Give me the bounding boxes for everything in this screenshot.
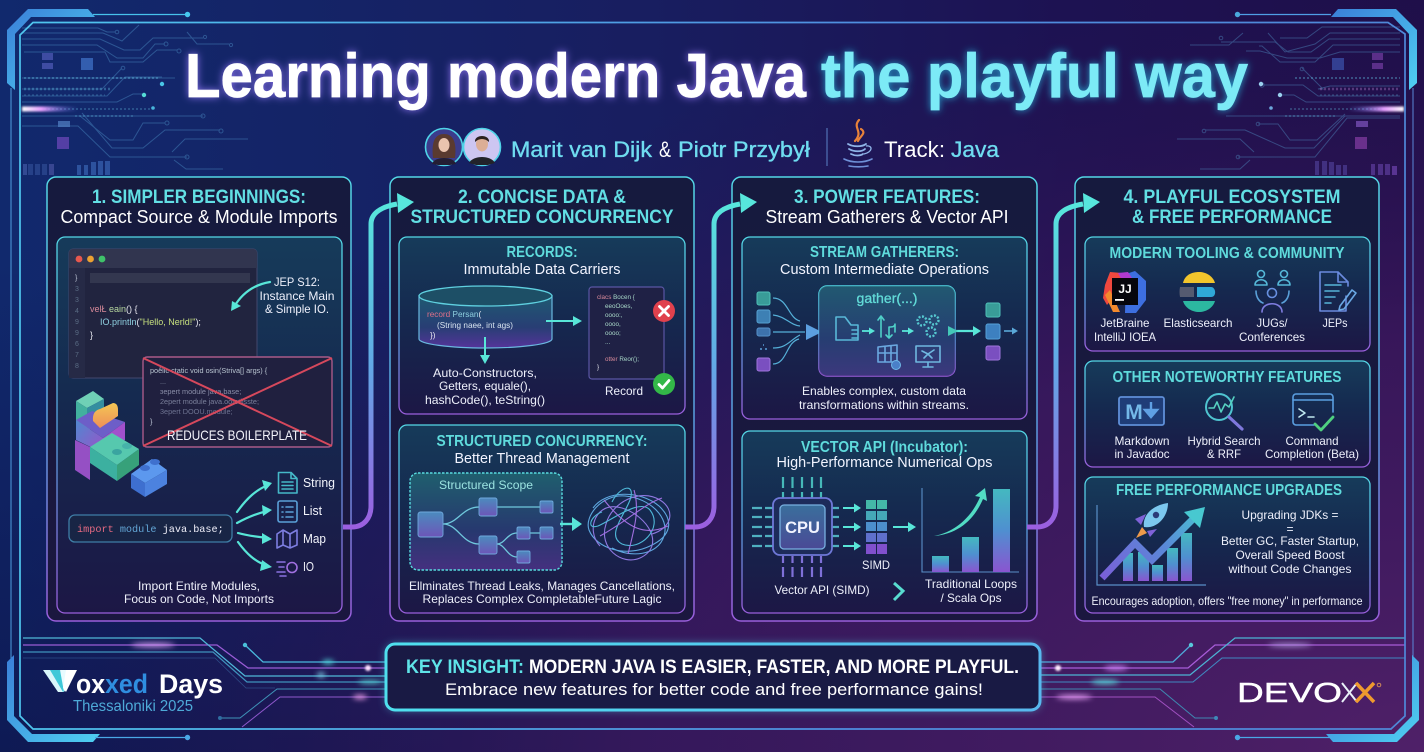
gatherers description: Enables complex, custom data <box>802 384 966 398</box>
sub-panel: structured concurrency <box>399 425 685 613</box>
sub-panel: structured concurrency: Better Thread Management <box>454 451 630 467</box>
panel 2 heading <box>410 187 674 228</box>
icon: markdown <box>1119 397 1164 425</box>
logo: voxxed days thessaloniki: oxxed <box>76 669 148 699</box>
code window: compact source: 9 <box>75 330 79 337</box>
code window: compact source: } <box>90 330 93 340</box>
callout: JEP 512 <box>231 275 334 316</box>
crossed-out boilerplate code: 3epert DOOU.module; <box>160 407 233 416</box>
icon: elasticsearch <box>1180 272 1215 312</box>
icon: cpu chip <box>752 477 839 577</box>
panel 1 summary: Focus on Code, Not Imports <box>124 592 274 606</box>
track label: Java <box>951 137 1000 162</box>
code window: compact source: 7 <box>75 352 79 359</box>
upgrade text: Better GC, Faster Startup, <box>1221 534 1359 548</box>
icon: tangled threads <box>588 488 670 560</box>
arrow to chart <box>893 522 916 532</box>
adoption note: Encourages adoption, offers "free money" in performance <box>1092 594 1363 608</box>
title: Learning modern Java <box>185 42 806 111</box>
panel 3 heading <box>766 187 1008 227</box>
sub-panel: tooling and community <box>1085 237 1370 351</box>
speaker names <box>511 137 810 162</box>
panel 2 heading: STRUCTURED CONCURRENCY <box>410 207 674 228</box>
crossed-out boilerplate code: poêlic ctatic void osin(Striva[] args) { <box>150 366 268 375</box>
module list: String, List, Map, IO: List <box>303 504 323 518</box>
panel 3: power features <box>732 177 1037 621</box>
logo: devoxx <box>1237 677 1381 708</box>
class versus record code card: oooo, <box>605 321 621 328</box>
code window: compact source: IO.println("Hello, Nerld!"); <box>100 317 201 327</box>
class versus record code card: ... <box>605 339 610 346</box>
sub-panel: stream gatherers <box>742 237 1027 419</box>
logo: voxxed days thessaloniki: Thessaloniki 2025 <box>73 698 193 715</box>
arrow: panel 1 to panel 2 <box>343 193 414 527</box>
SIMD grid: SIMD <box>862 558 890 572</box>
sub-panel: vector api <box>742 431 1027 613</box>
speaker names: Marit van Dijk <box>511 137 653 162</box>
upgrade text <box>1221 508 1359 576</box>
title: the playful way <box>821 42 1248 111</box>
SIMD grid <box>862 500 890 572</box>
sub-panel: records: RECORDS: <box>506 244 578 261</box>
sub-panel: free performance upgrades: FREE PERFORMANCE UPGRADES <box>1116 482 1342 499</box>
code window: compact source: } <box>75 275 78 282</box>
module list: String, List, Map, IO: String <box>303 476 335 490</box>
icon: markdown: M <box>1125 401 1143 424</box>
logo: voxxed days thessaloniki <box>43 669 223 715</box>
panel 2 heading: 2. CONCISE DATA & <box>458 187 626 208</box>
key insight callout: MODERN JAVA IS EASIER, FASTER, AND MORE PLAYFUL. <box>529 657 1019 678</box>
upgrade text: without Code Changes <box>1227 562 1352 576</box>
logo: voxxed days thessaloniki: Days <box>159 669 223 699</box>
arrow: panel 2 to panel 3 <box>685 193 757 527</box>
sub-panel: tooling and community: MODERN TOOLING & COMMUNITY <box>1110 245 1345 262</box>
record cylinder: record Persan( <box>427 310 481 319</box>
tool labels: JetBraine <box>1100 316 1150 330</box>
icon: people <box>1255 270 1290 312</box>
crossed-out boilerplate code: REDUCES BOILERPLATE <box>167 427 307 443</box>
icon: hybrid search <box>1206 394 1242 429</box>
tool labels <box>1094 316 1348 344</box>
panel 4 heading <box>1124 187 1340 228</box>
icon: command terminal <box>1293 394 1333 430</box>
sub-panel: stream gatherers: STREAM GATHERERS: <box>810 244 959 261</box>
icon: java cup <box>844 120 872 167</box>
upgrade text: Overall Speed Boost <box>1236 548 1345 562</box>
class versus record code card: clacs Bocen { <box>597 294 635 301</box>
icon: document with pen <box>1320 272 1356 311</box>
crossed-out boilerplate code: ... <box>160 377 166 386</box>
feature labels <box>1114 434 1359 461</box>
class versus record code card: } <box>597 364 599 371</box>
feature labels: Markdown <box>1114 434 1170 448</box>
structured scope tree: Structured Scope <box>439 478 533 492</box>
code window: compact source: 8 <box>75 363 79 370</box>
record cylinder: }) <box>430 331 436 340</box>
sub-panel: records: Immutable Data Carriers <box>464 262 620 278</box>
class versus record code card <box>589 287 675 398</box>
panel 2 summary: Ellminates Thread Leaks, Manages Cancellations, <box>409 579 675 593</box>
sub-panel: vector api: VECTOR API (Incubator): <box>801 439 968 456</box>
module list: String, List, Map, IO: Map <box>303 532 326 546</box>
tool labels: IntelliJ IOEA <box>1094 330 1156 344</box>
feature labels: Command <box>1286 434 1338 448</box>
code window: compact source: 6 <box>75 341 79 348</box>
icon: cpu chip: CPU <box>785 519 820 537</box>
panel 1: simpler beginnings <box>47 177 351 621</box>
panel 3 heading: Stream Gatherers & Vector API <box>766 207 1008 227</box>
gatherers description <box>799 384 969 412</box>
sub-panel: other noteworthy features: OTHER NOTEWORTHY FEATURES <box>1112 369 1342 386</box>
tool labels: JEPs <box>1322 316 1348 330</box>
bar chart: performance <box>922 488 1019 572</box>
code window: compact source: velŁ eain() { <box>90 304 138 314</box>
class versus record code card: Record <box>605 384 643 398</box>
code window: compact source: 3 <box>75 286 79 293</box>
icon: intellij: JJ <box>1118 282 1132 296</box>
gather box <box>819 286 981 376</box>
sub-panel: vector api: High-Performance Numerical Ops <box>776 455 992 471</box>
vector comparison labels: Vector API (SIMD) <box>774 583 870 597</box>
crossed-out boilerplate code: 2epert module java.ootetlisste; <box>160 397 259 406</box>
speaker names: Piotr Przybył <box>678 137 810 162</box>
panel 3 heading: 3. POWER FEATURES: <box>794 187 980 208</box>
record cylinder <box>419 286 552 348</box>
sub-panel: other noteworthy features <box>1085 361 1370 467</box>
class versus record code card: oooo; <box>605 330 621 337</box>
logo: devoxx: DEVO <box>1237 677 1342 708</box>
gatherers description: transformations within streams. <box>799 398 969 412</box>
panel 1 summary: Import Entire Modules, <box>138 579 260 593</box>
panel 1 heading: 1. SIMPLER BEGINNINGS: <box>92 187 306 208</box>
panel 1 heading <box>60 187 338 227</box>
panel 2: concise data and structured concurrency <box>390 177 694 621</box>
class versus record code card: oooo:, <box>605 312 623 319</box>
arrows to module packages <box>237 480 272 571</box>
key insight callout: Embrace new features for better code and free performance gains! <box>445 680 983 699</box>
key insight callout: KEY INSIGHT: <box>406 657 524 678</box>
vector comparison labels: / Scala Ops <box>940 591 1002 605</box>
code window: compact source <box>69 249 257 378</box>
output elements <box>986 303 1018 360</box>
callout: JEP 512: Instance Main <box>260 289 334 303</box>
upgrade text: Upgrading JDKs = <box>1242 508 1338 522</box>
structured scope tree <box>410 473 562 570</box>
vector comparison labels: Traditional Loops <box>925 577 1017 591</box>
track label: Track: <box>884 137 945 162</box>
module list: String, List, Map, IO: IO <box>303 560 314 574</box>
arrows from record <box>480 316 582 364</box>
sub-panel: records <box>399 237 685 414</box>
icon: building blocks <box>75 391 167 497</box>
panel 4 heading: 4. PLAYFUL ECOSYSTEM <box>1124 187 1340 208</box>
tool labels: JUGs/ <box>1256 316 1288 330</box>
tool labels: Elasticsearch <box>1164 316 1232 330</box>
code window: compact source: 4 <box>75 308 79 315</box>
generated members text: Auto-Constructors, <box>433 366 537 380</box>
panel 1 summary <box>124 579 274 606</box>
generated members text: hashCode(), teString() <box>425 393 545 407</box>
upgrade text: = <box>1286 522 1294 536</box>
funnel triangle and arrow <box>806 324 832 340</box>
code window: compact source: 9 <box>75 319 79 326</box>
import module code box <box>69 515 232 542</box>
generated members text <box>425 366 545 407</box>
tool labels: Conferences <box>1239 330 1305 344</box>
crossed-out boilerplate code: ɜepert module java.base; <box>160 387 241 396</box>
feature labels: Completion (Beta) <box>1265 447 1359 461</box>
panel 4 heading: & FREE PERFORMANCE <box>1132 207 1332 228</box>
speaker names: & <box>659 137 671 162</box>
panel 2 summary <box>409 579 675 606</box>
arrow: panel 3 to panel 4 <box>1027 193 1100 527</box>
arrows to SIMD <box>843 504 861 550</box>
input elements <box>757 292 805 371</box>
record cylinder: (String naee, int ags) <box>437 321 513 330</box>
icon: rocket <box>1135 503 1168 538</box>
speaker avatars <box>426 128 500 166</box>
panel 1 heading: Compact Source & Module Imports <box>60 207 338 227</box>
panel 2 summary: Replaces Complex CompletableFuture Lagic <box>422 592 662 606</box>
sub-panel: structured concurrency: STRUCTURED CONCURRENCY: <box>436 433 648 450</box>
chart: rising performance with rocket <box>1097 503 1206 585</box>
vector comparison labels <box>774 577 1017 605</box>
class versus record code card: otter Reor(); <box>605 356 639 363</box>
gather box: gather(...) <box>856 291 918 306</box>
icon: voxxed V <box>43 670 77 692</box>
feature labels: Hybrid Search <box>1188 434 1260 448</box>
speakers and track <box>426 120 1000 167</box>
arrow: scope to tangle <box>560 517 582 531</box>
crossed-out boilerplate code <box>143 357 332 447</box>
panel 4: playful ecosystem <box>1075 177 1379 621</box>
key insight callout <box>386 644 1040 710</box>
class versus record code card: eeoOoes, <box>605 303 633 310</box>
code window: compact source: 3 <box>75 297 79 304</box>
title <box>185 42 1248 111</box>
sub-panel: stream gatherers: Custom Intermediate Operations <box>780 262 989 278</box>
module list: String, List, Map, IO <box>277 472 335 576</box>
sub-panel: free performance upgrades <box>1085 477 1370 613</box>
track label <box>884 137 1000 162</box>
icon: intellij <box>1103 271 1146 313</box>
feature labels: & RRF <box>1207 447 1241 461</box>
import module code box: import module java.base; <box>77 524 224 536</box>
crossed-out boilerplate code: } <box>150 417 153 426</box>
feature labels: in Javadoc <box>1114 447 1170 461</box>
callout: JEP 512: JEP S12: <box>274 275 320 289</box>
generated members text: Getters, equale(), <box>439 379 531 393</box>
callout: JEP 512: & Simple IO. <box>265 302 329 316</box>
